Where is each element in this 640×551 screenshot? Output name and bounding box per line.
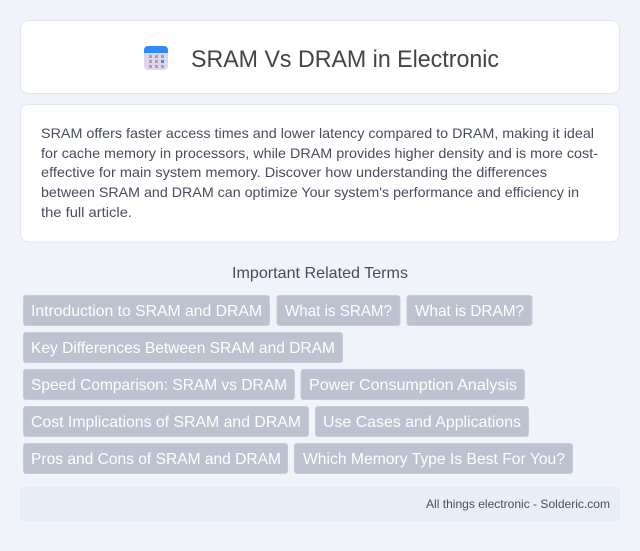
tag: use cases bbox=[316, 406, 528, 436]
tag: what is DRAM bbox=[407, 296, 532, 326]
tag: speed comparison: Speed Comparison: SRAM vs DRAM bbox=[31, 377, 287, 394]
tag: what is SRAM: What is SRAM? bbox=[285, 303, 392, 320]
tag: pros and cons: Pros and Cons of SRAM and DRAM bbox=[31, 451, 281, 468]
tag: power consumption bbox=[301, 370, 524, 400]
tag: what is DRAM: What is DRAM? bbox=[415, 303, 524, 320]
footer credit: All things electronic - Solderic.com bbox=[426, 497, 610, 511]
tag: key differences bbox=[24, 332, 342, 362]
text block: summary: SRAM offers faster access times and lower latency compared to DRAM, making it ideal bbox=[41, 125, 594, 141]
icon: calendar bbox=[144, 46, 168, 70]
tag: which memory bbox=[294, 444, 572, 474]
tag: speed comparison bbox=[24, 370, 294, 400]
tag: introduction bbox=[24, 296, 270, 326]
panel: summary card bbox=[20, 104, 620, 242]
text block: summary: between SRAM and DRAM can optimize Your system's performance and efficiency in bbox=[41, 184, 579, 200]
tag list bbox=[24, 296, 572, 474]
title: SRAM Vs DRAM in Electronic bbox=[191, 46, 499, 73]
text block: summary bbox=[41, 125, 598, 220]
tag: what is SRAM bbox=[277, 296, 400, 326]
tag: cost implications: Cost Implications of SRAM and DRAM bbox=[31, 414, 301, 431]
tag: key differences: Key Differences Between SRAM and DRAM bbox=[31, 340, 335, 357]
text block: summary: the full article. bbox=[41, 204, 132, 220]
heading: related terms: Important Related Terms bbox=[232, 265, 408, 282]
tag: pros and cons bbox=[24, 444, 288, 474]
tag: use cases: Use Cases and Applications bbox=[323, 414, 521, 431]
footer bar bbox=[20, 487, 620, 521]
tag: which memory: Which Memory Type Is Best For You? bbox=[303, 451, 565, 468]
tag: introduction: Introduction to SRAM and DRAM bbox=[31, 303, 262, 320]
text block: summary: for cache memory in processors, while DRAM provides higher density and is more cost- bbox=[41, 145, 598, 161]
text block: summary: effective for main system memory. Discover how understanding the differences bbox=[41, 164, 547, 180]
tag: cost implications bbox=[24, 406, 308, 436]
tag: power consumption: Power Consumption Analysis bbox=[309, 377, 517, 394]
panel: title card bbox=[20, 20, 620, 94]
